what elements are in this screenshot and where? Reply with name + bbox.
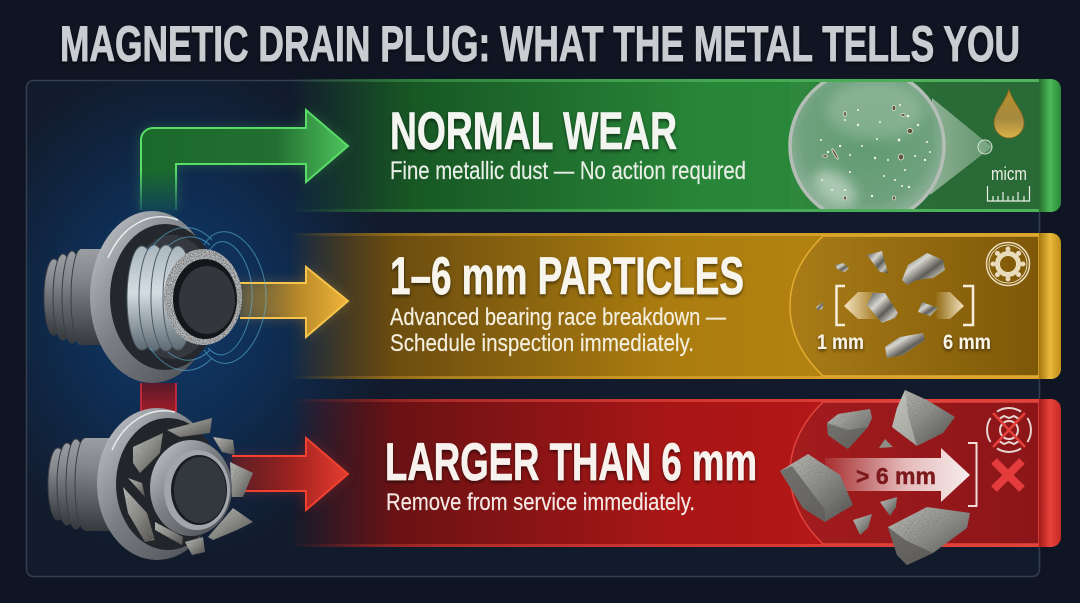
- debris: [123, 418, 253, 555]
- right detail area: [790, 82, 1039, 209]
- end cap: [1039, 233, 1061, 379]
- cap: [174, 457, 226, 523]
- connector: red stub: [141, 383, 176, 413]
- size arrow: [825, 448, 970, 502]
- outer frame panel: [26, 80, 1040, 576]
- panel: 1-6 mm particles: Schedule inspection immediately.: [390, 330, 694, 357]
- scale label: micm: [991, 164, 1027, 184]
- icon: ruler: [988, 186, 1030, 201]
- size arrow label: > 6 mm: [856, 463, 936, 489]
- panel: normal wear: [298, 79, 1061, 212]
- description: Fine metallic dust — No action required: [390, 157, 746, 185]
- collar: [150, 440, 232, 536]
- panel: 1-6 mm particles: [290, 233, 1061, 379]
- flange: [97, 408, 217, 560]
- magnifier lens with dust: [788, 82, 992, 209]
- description: Advanced bearing race breakdown —: [390, 304, 726, 331]
- size labels: 1 mm: [817, 331, 864, 354]
- front threads: [127, 245, 193, 351]
- icon: oil drop: [994, 89, 1024, 138]
- heading: LARGER THAN 6 mm: [385, 433, 757, 492]
- end cap: [1039, 79, 1061, 212]
- arrow: red: [232, 438, 348, 510]
- metal flakes: [816, 251, 945, 358]
- icon: magnetic plug with fine dust: [44, 211, 266, 383]
- size bracket: [968, 443, 976, 506]
- heading: NORMAL WEAR: [390, 102, 677, 161]
- arrow: green: [140, 110, 348, 212]
- icon: red cross: [994, 461, 1022, 489]
- right detail area: [790, 236, 1039, 376]
- icon: broken gear: [987, 408, 1031, 452]
- end cap: [1039, 399, 1061, 547]
- heading: 1–6 mm PARTICLES: [390, 247, 744, 306]
- cap: [179, 266, 235, 334]
- size range brackets: [836, 286, 973, 325]
- right detail area: [790, 402, 1039, 544]
- rear threads: [48, 438, 95, 530]
- metal chunks: [780, 390, 970, 565]
- description: Remove from service immediately.: [386, 489, 695, 516]
- panel: larger than 6 mm: [290, 390, 1061, 565]
- arrow: amber: [240, 267, 348, 337]
- panel: 1-6 mm particles: 6 mm: [943, 331, 991, 354]
- flange: [90, 211, 214, 383]
- rear threads: [44, 249, 91, 345]
- icon: damaged plug with large chunks: [48, 408, 253, 560]
- icon: bearing: [986, 242, 1030, 286]
- focus point: [978, 140, 992, 154]
- dust ring: [164, 249, 242, 345]
- magnetic field lines: [150, 228, 266, 370]
